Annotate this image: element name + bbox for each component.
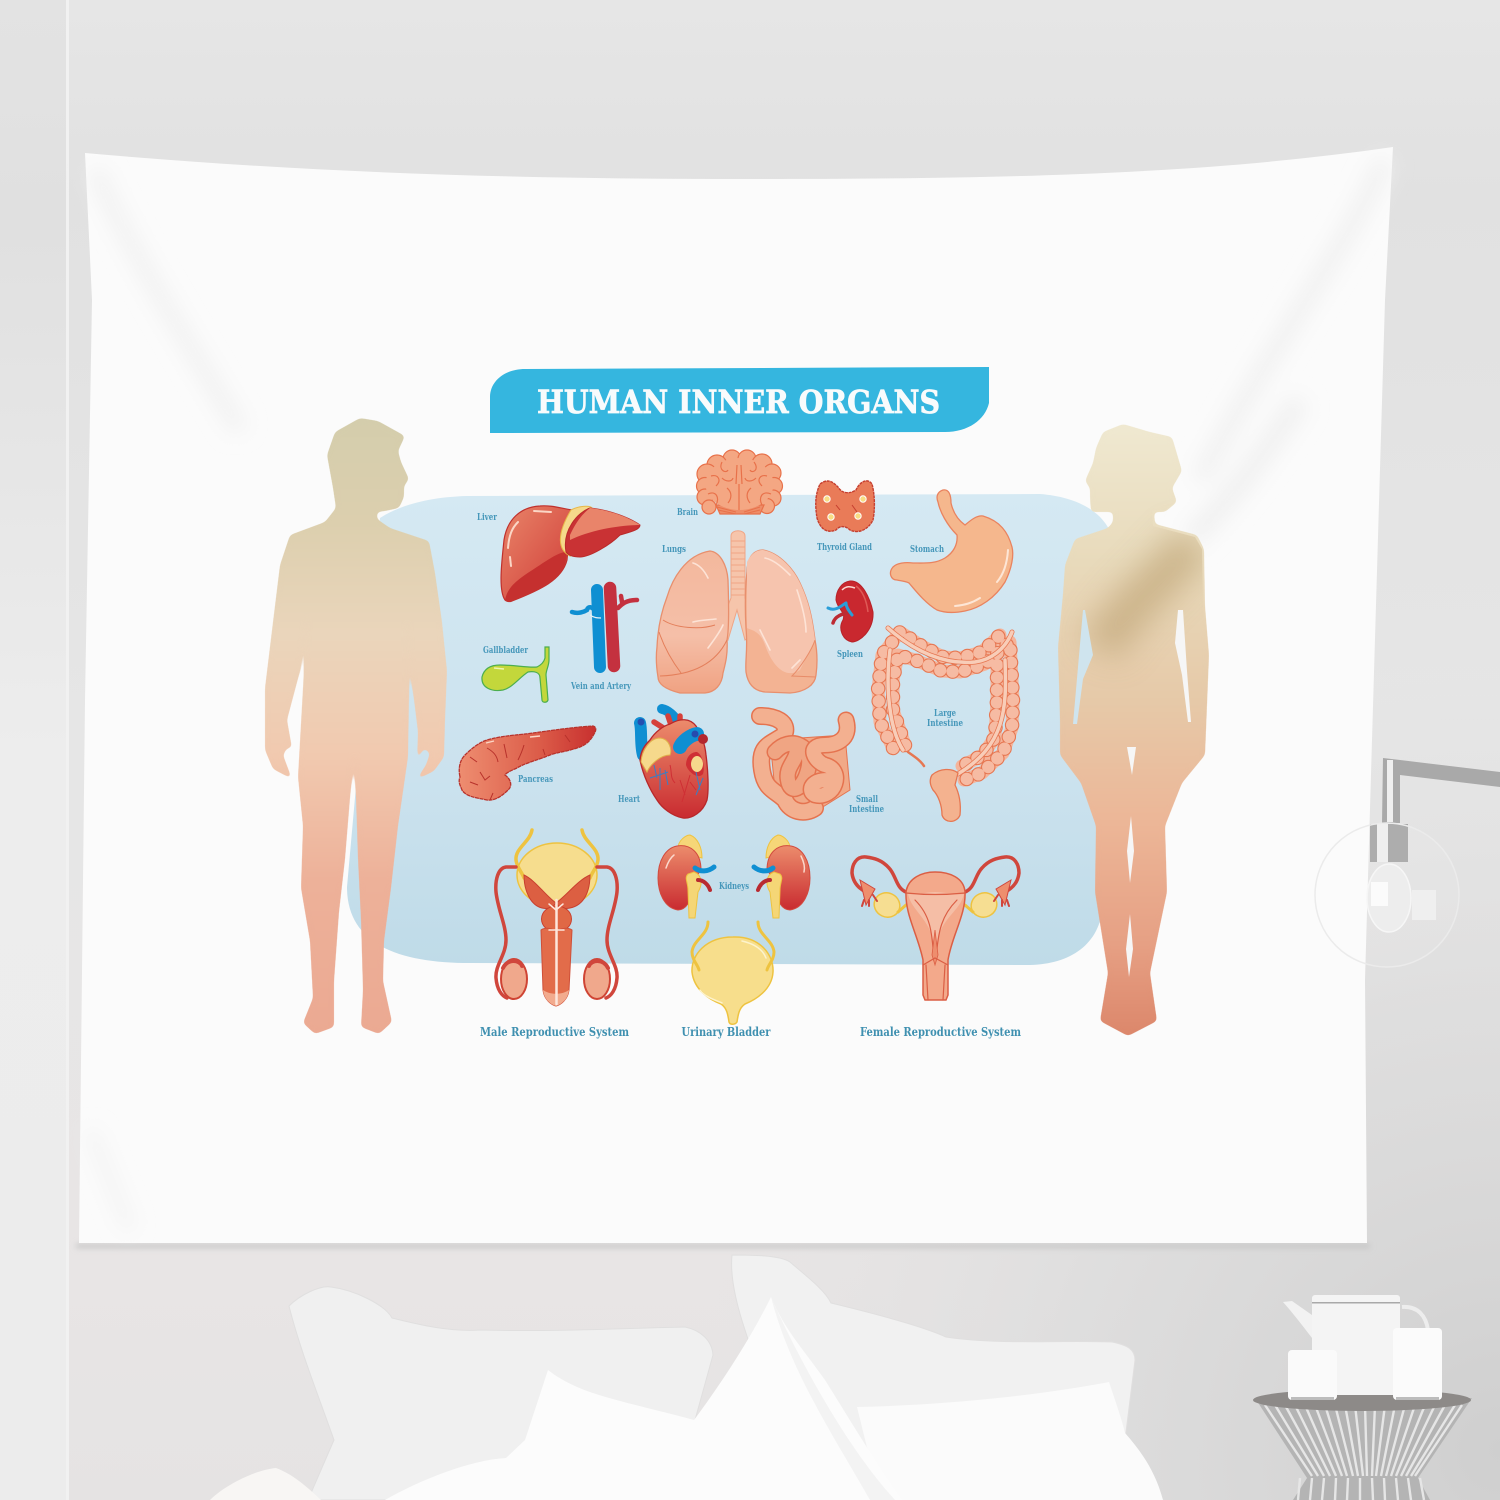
tapestry shadow: [76, 1244, 1370, 1248]
male bladder: [517, 843, 597, 907]
wall shading: [700, 650, 1500, 1500]
teapot: [1283, 1301, 1312, 1338]
label: kidneys: Kidneys: [719, 882, 749, 892]
back right pillow: [732, 1255, 1163, 1500]
tapestry cloth: [79, 147, 1393, 1243]
icon: large intestine: [878, 628, 1013, 821]
label: gallbladder: Gallbladder: [483, 646, 528, 656]
icon: urinary bladder: [692, 922, 774, 1024]
cup left: [1288, 1350, 1337, 1400]
male silhouette: [265, 418, 447, 1034]
wall panel seam: [0, 0, 69, 1500]
icon: gallbladder: [482, 647, 549, 702]
label: lungs: Lungs: [662, 545, 686, 555]
icon: trachea and lungs: [656, 531, 817, 693]
wall lamp: [1315, 758, 1500, 967]
ureters: [516, 830, 598, 878]
label: small intestine: Small: [856, 795, 878, 805]
fallopian tubes: [852, 857, 1019, 892]
label: female reproductive system: Female Reproductive System: [860, 1024, 1021, 1039]
label: vein and artery: Vein and Artery: [570, 682, 632, 692]
bottom-left sheet: [210, 1468, 321, 1500]
vas deferens: [496, 867, 617, 998]
icon: kidneys: [658, 835, 810, 918]
label: male reproductive system: Male Reproductive System: [480, 1024, 629, 1039]
tapestry folds: [90, 160, 1385, 1230]
front sheet: [385, 1297, 902, 1500]
label: heart: Heart: [618, 795, 641, 805]
front right pillow: [857, 1382, 1163, 1500]
ovaries: [870, 889, 904, 921]
icon: male reproductive system: [496, 830, 617, 1006]
penis: [541, 928, 572, 1006]
icon: female reproductive system: [852, 857, 1019, 1000]
icon: spleen: [828, 581, 873, 642]
icon: pancreas: [459, 726, 596, 800]
bulb: [1367, 864, 1411, 932]
label: thyroid gland: Thyroid Gland: [817, 543, 873, 553]
label: liver: Liver: [477, 513, 497, 523]
label: stomach: Stomach: [910, 545, 944, 555]
seminal glands: [524, 875, 590, 909]
glow: [1315, 823, 1459, 967]
prostate: [542, 906, 572, 932]
label: large intestine: Intestine: [927, 719, 963, 729]
icon: small intestine: [760, 716, 850, 815]
label: large intestine: [927, 709, 963, 729]
title text: HUMAN INNER ORGANS: [537, 383, 940, 421]
icon: stomach: [890, 490, 1013, 612]
side table with teapot and cups: [1253, 1295, 1472, 1500]
arm and leg gaps: [1073, 610, 1093, 724]
back left pillow: [289, 1287, 713, 1500]
female silhouette: [1058, 424, 1209, 1036]
icon: thyroid gland: [816, 481, 874, 532]
blue background panel: [347, 494, 1115, 965]
label: spleen: Spleen: [837, 650, 863, 660]
icon: vein and artery: [572, 588, 637, 667]
testes: [501, 959, 527, 999]
cup right: [1393, 1328, 1442, 1400]
icon: brain: [696, 450, 782, 514]
table wires: [1255, 1398, 1472, 1500]
icon: liver: [501, 506, 640, 602]
label: brain: Brain: [677, 508, 698, 518]
label: pancreas: Pancreas: [518, 775, 553, 785]
uterus: [906, 872, 965, 1000]
label: small intestine: [849, 795, 884, 815]
icon: heart: [638, 709, 708, 818]
title banner: [490, 367, 989, 433]
label: small intestine: Intestine: [849, 805, 884, 815]
label: large intestine: Large: [934, 709, 956, 719]
label: urinary bladder: Urinary Bladder: [682, 1024, 771, 1039]
